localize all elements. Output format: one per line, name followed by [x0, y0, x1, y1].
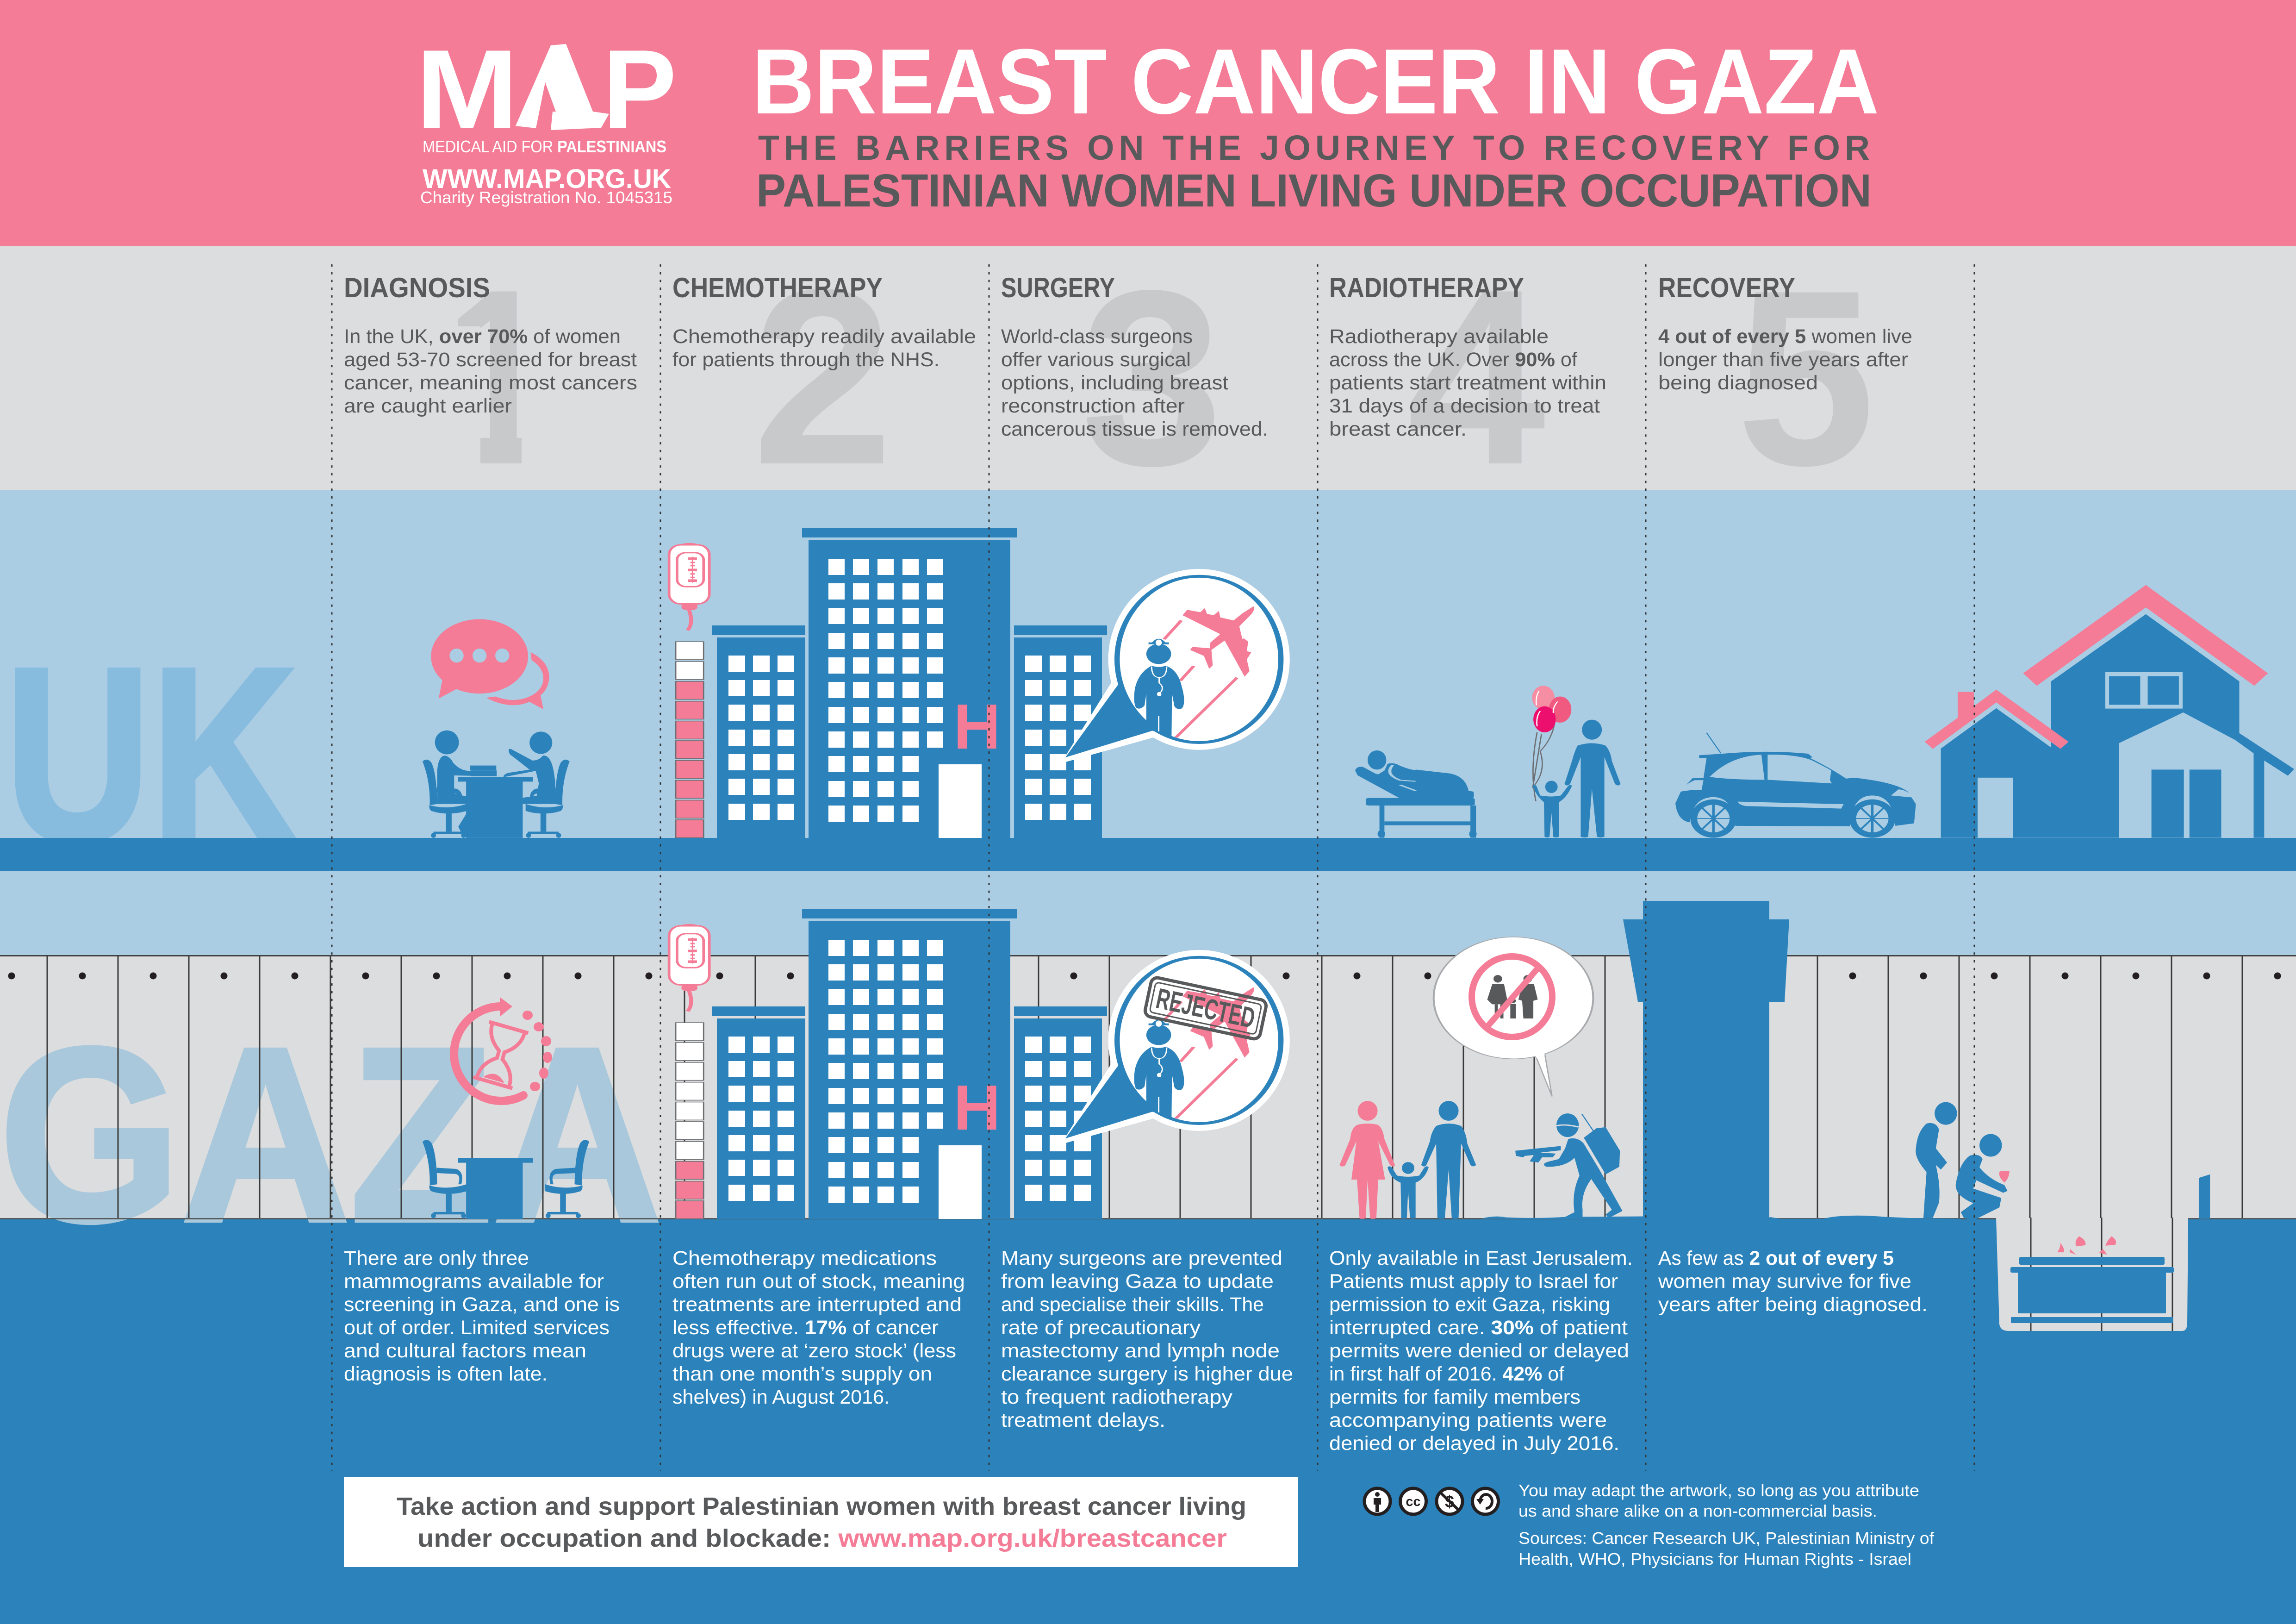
callout: surgeon and plane UK [1061, 569, 1290, 763]
panel: chemotherapy UK text: CHEMOTHERAPY [672, 272, 883, 303]
panel: diagnosis Gaza text: out of order. Limited services [344, 1317, 610, 1339]
panel: chemotherapy Gaza text: shelves) in August 2016. [672, 1386, 890, 1408]
icons: creative commons licence: $ [1445, 1492, 1454, 1511]
panel: diagnosis Gaza text [344, 1247, 620, 1385]
panel: radiotherapy UK text: 31 days of a decision to treat [1329, 395, 1600, 417]
big label: GAZA: GAZA [0, 997, 662, 1273]
step number 2: 2 [752, 237, 893, 517]
UK hospital with chemo drip [669, 528, 1107, 838]
licence text: us and share alike on a non-commercial basis. [1518, 1501, 1877, 1520]
charity registration: Charity Registration No. 1045315 [420, 188, 672, 207]
panel: radiotherapy Gaza text: permits for family members [1329, 1386, 1580, 1408]
panel: diagnosis Gaza text: and cultural factors mean [344, 1340, 586, 1362]
icon: speech bubbles [431, 619, 549, 709]
panel: radiotherapy UK text: across the UK. Over 90% of [1329, 349, 1578, 371]
panel: radiotherapy Gaza text: Patients must apply to Israel for [1329, 1270, 1618, 1293]
Gaza hospital with chemo drip [669, 909, 1107, 1219]
rejected stamp: REJECTED [1153, 982, 1258, 1035]
petals [2057, 1236, 2116, 1255]
panel: chemotherapy Gaza text: than one month’s supply on [672, 1363, 932, 1385]
panel: diagnosis UK text: aged 53-70 screened for breast [344, 349, 637, 371]
call to action box: under occupation and blockade: www.map.org.uk/breastcancer [417, 1524, 1227, 1552]
panel: chemotherapy UK text [672, 272, 976, 371]
panel: radiotherapy Gaza text: Only available in East Jerusalem. [1329, 1247, 1633, 1269]
panel: surgery Gaza text: rate of precautionary [1001, 1317, 1201, 1339]
panel: diagnosis Gaza text: mammograms available for [344, 1270, 604, 1293]
panel: radiotherapy Gaza text: denied or delayed in July 2016. [1329, 1432, 1619, 1455]
panel: diagnosis Gaza text: screening in Gaza, and one is [344, 1293, 620, 1316]
step number 5: 5 [1736, 238, 1875, 518]
panel: radiotherapy UK text: Radiotherapy available [1329, 325, 1549, 348]
panel: surgery UK text: offer various surgical [1001, 349, 1191, 371]
header logo: MAP: P [603, 27, 677, 152]
call to action box: Take action and support Palestinian women with breast cancer living [397, 1493, 1246, 1520]
panel: surgery Gaza text: Many surgeons are prevented [1001, 1247, 1282, 1269]
panel: radiotherapy Gaza text: interrupted care. 30% of patient [1329, 1317, 1628, 1339]
panel: radiotherapy UK text: patients start treatment within [1329, 372, 1606, 394]
panel: chemotherapy Gaza text: drugs were at ‘zero stock’ (less [672, 1340, 956, 1362]
coffin [2010, 1257, 2174, 1323]
panel: radiotherapy Gaza text: permission to exit Gaza, risking [1329, 1293, 1610, 1316]
big label: UK: UK [5, 617, 297, 893]
UK patient on bed [1355, 750, 1477, 838]
panel: diagnosis UK text: are caught earlier [344, 395, 512, 417]
licence text: You may adapt the artwork, so long as you attribute [1518, 1481, 1919, 1500]
panel: chemotherapy Gaza text: Chemotherapy medications [672, 1247, 937, 1269]
hospital H: H [953, 691, 1001, 762]
panel: radiotherapy UK text: breast cancer. [1329, 418, 1467, 440]
panel: surgery UK text: cancerous tissue is removed. [1001, 418, 1268, 440]
panel: surgery UK text: SURGERY [1001, 272, 1115, 303]
panel: surgery UK text: options, including breast [1001, 372, 1228, 394]
background: header band [0, 0, 2296, 246]
panel: chemotherapy Gaza text [672, 1247, 965, 1408]
sources text: Health, WHO, Physicians for Human Rights - Israel [1518, 1549, 1911, 1568]
Gaza checkpoint tower [1623, 901, 1789, 1222]
icon: hourglass with delay arrow [454, 997, 552, 1101]
background: Gaza ground band [0, 1219, 2296, 1624]
panel: recovery Gaza text: years after being diagnosed. [1658, 1293, 1928, 1316]
chemo stock bars Gaza [676, 1023, 703, 1219]
sources text: Sources: Cancer Research UK, Palestinian Ministry of [1518, 1529, 1935, 1548]
title: BREAST CANCER IN GAZA [752, 30, 1879, 133]
panel: recovery UK text: being diagnosed [1658, 372, 1818, 394]
website: WWW.MAP.ORG.UK [423, 164, 671, 194]
UK father and child [1533, 720, 1621, 837]
ground rubble [1481, 1216, 1961, 1220]
callout: family entry prohibited [1434, 937, 1593, 1096]
subtitle line 1: THE BARRIERS ON THE JOURNEY TO RECOVERY FOR [758, 128, 1870, 167]
rejected stamp [1144, 977, 1267, 1040]
panel: recovery Gaza text [1658, 1247, 1928, 1316]
header logo: MAP [416, 27, 677, 152]
licence text [1518, 1481, 1919, 1520]
panel: recovery UK text: 4 out of every 5 women live [1658, 325, 1912, 348]
panel: radiotherapy Gaza text: accompanying patients were [1329, 1409, 1607, 1431]
panel: chemotherapy UK text: Chemotherapy readily available [672, 325, 976, 348]
panel: radiotherapy Gaza text: permits were denied or delayed [1329, 1340, 1629, 1362]
UK ground [0, 838, 2296, 871]
Gaza family [1339, 1101, 1476, 1219]
background: sky band [0, 490, 2296, 957]
panel: diagnosis UK text [344, 272, 637, 417]
panel: radiotherapy Gaza text: in first half of 2016. 42% of [1329, 1363, 1565, 1385]
panel: recovery UK text: longer than five years after [1658, 349, 1908, 371]
background: grey UK facts band [0, 246, 2296, 490]
panel: diagnosis UK text: DIAGNOSIS [344, 272, 490, 303]
soldier [1515, 1113, 1623, 1218]
grave pit [1996, 1218, 2188, 1331]
UK houses [1925, 585, 2294, 838]
panel: surgery Gaza text: treatment delays. [1001, 1409, 1165, 1431]
callout: rejected surgeon Gaza [1061, 950, 1290, 1144]
panel: recovery UK text [1658, 272, 1912, 394]
header logo: MAP: M [416, 27, 518, 152]
separation wall [0, 955, 2296, 1273]
panel: recovery Gaza text: As few as 2 out of every 5 [1658, 1247, 1894, 1269]
panel: recovery Gaza text: women may survive for five [1658, 1270, 1911, 1293]
panel: radiotherapy UK text [1329, 272, 1606, 440]
step number 3: 3 [1081, 238, 1223, 518]
chemo stock bars UK [676, 642, 703, 838]
hospital H Gaza: H [953, 1072, 1001, 1143]
panel: diagnosis UK text: In the UK, over 70% of women [344, 325, 621, 348]
balloons [1532, 686, 1571, 801]
subtitle line 2: PALESTINIAN WOMEN LIVING UNDER OCCUPATION [756, 165, 1872, 217]
panel: chemotherapy Gaza text: treatments are interrupted and [672, 1293, 962, 1316]
mourners at the grave [1916, 1102, 2210, 1220]
icons: creative commons licence: cc [1406, 1494, 1421, 1509]
panel: chemotherapy Gaza text: less effective. 17% of cancer [672, 1317, 939, 1339]
UK consultation scene [423, 731, 570, 838]
panel: surgery UK text [1001, 272, 1268, 440]
panel: surgery Gaza text: from leaving Gaza to update [1001, 1270, 1274, 1293]
panel: chemotherapy UK text: for patients through the NHS. [672, 349, 940, 371]
sources text [1518, 1529, 1935, 1568]
logo strapline: MEDICAL AID FOR PALESTINIANS [423, 137, 666, 156]
panel: surgery UK text: reconstruction after [1001, 395, 1185, 417]
Gaza empty desk scene [423, 1140, 589, 1219]
panel: surgery UK text: World-class surgeons [1001, 325, 1193, 348]
panel: radiotherapy Gaza text [1329, 1247, 1633, 1455]
panel: surgery Gaza text: and specialise their skills. The [1001, 1293, 1264, 1316]
call to action box [344, 1477, 1298, 1567]
step number 4: 4 [1407, 237, 1547, 517]
panel: diagnosis UK text: cancer, meaning most cancers [344, 372, 637, 394]
panel: radiotherapy UK text: RADIOTHERAPY [1329, 272, 1524, 303]
panel: diagnosis Gaza text: There are only three [344, 1247, 529, 1269]
panel: surgery Gaza text: to frequent radiotherapy [1001, 1386, 1233, 1408]
panel: chemotherapy Gaza text: often run out of stock, meaning [672, 1270, 965, 1293]
step number 1: 1 [444, 237, 553, 517]
panel: surgery Gaza text: mastectomy and lymph node [1001, 1340, 1280, 1362]
panel: surgery Gaza text [1001, 1247, 1293, 1431]
panel: recovery UK text: RECOVERY [1658, 272, 1795, 303]
panel: diagnosis Gaza text: diagnosis is often late. [344, 1363, 548, 1385]
UK car [1675, 733, 1916, 838]
panel: surgery Gaza text: clearance surgery is higher due [1001, 1363, 1293, 1385]
column dividers [332, 264, 1974, 1471]
icons: creative commons licence [1364, 1488, 1499, 1514]
